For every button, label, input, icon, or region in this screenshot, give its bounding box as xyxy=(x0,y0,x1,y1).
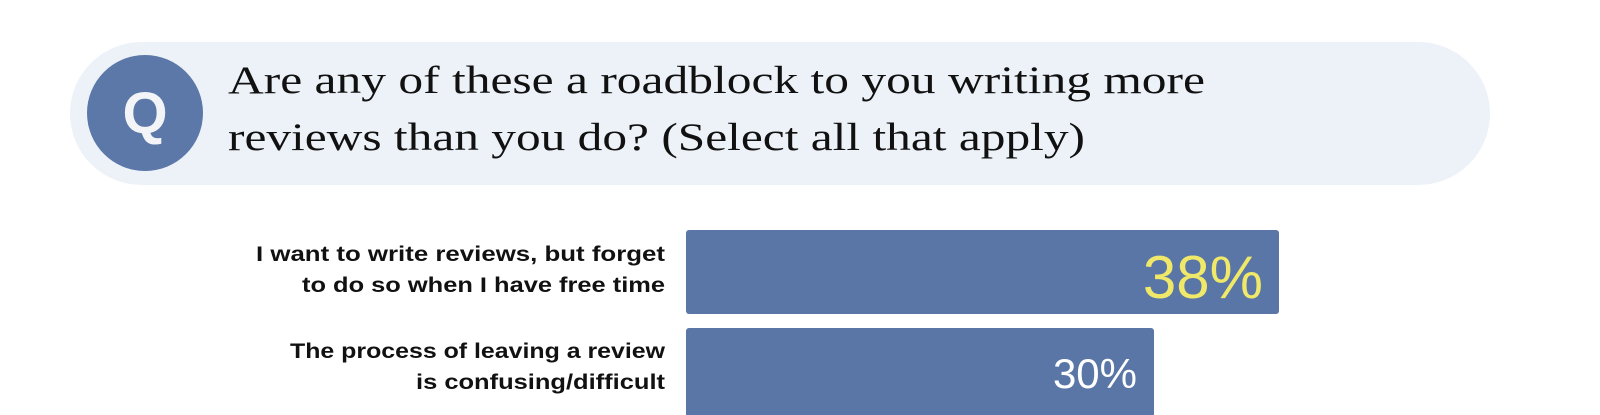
icon: Q circle: Q xyxy=(122,81,168,146)
icon: Q circle xyxy=(87,55,203,171)
question title: Are any of these a roadblock to you writing more xyxy=(228,59,1205,102)
question title: reviews than you do? (Select all that apply) xyxy=(228,116,1085,159)
row 1: I want to write reviews, but forget xyxy=(256,243,665,266)
row 2 xyxy=(290,328,1154,415)
bar chart xyxy=(256,230,1279,415)
row 1: 38% xyxy=(1143,244,1263,311)
row 2: 30% xyxy=(1053,350,1137,397)
row 2: is confusing/difficult xyxy=(416,371,665,394)
question title xyxy=(228,59,1205,159)
row 2: The process of leaving a review xyxy=(290,340,666,363)
question banner xyxy=(70,42,1490,185)
row 1: to do so when I have free time xyxy=(302,274,665,297)
row 1 xyxy=(256,230,1279,314)
